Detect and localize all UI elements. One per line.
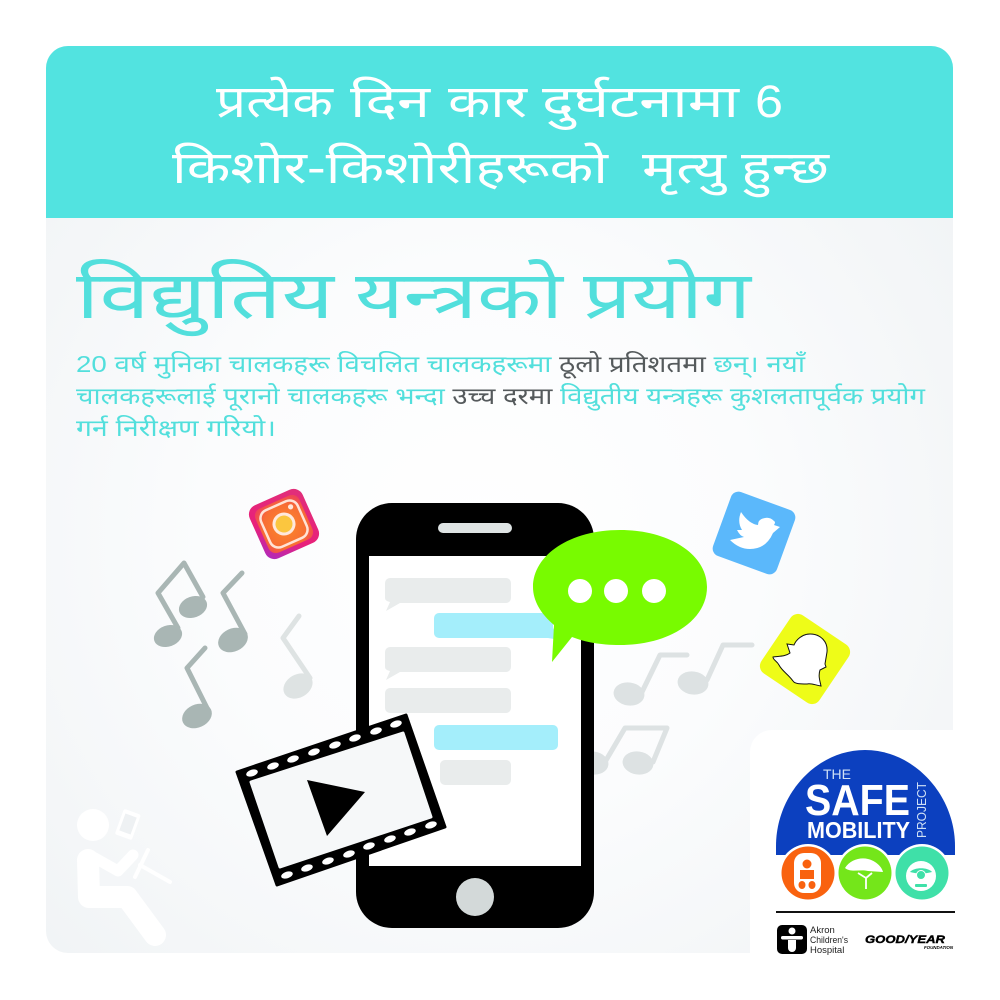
icon: snapchat (756, 610, 854, 708)
panel: logo corner (750, 730, 953, 953)
divider: logo rule (776, 911, 955, 913)
icon: film strip with play button (237, 715, 445, 885)
title: header text: दिन (350, 76, 431, 127)
logo: the safe mobility project: PROJECT (914, 782, 929, 838)
logo: akron children's hospital (777, 925, 848, 956)
logo: akron children's hospital: Hospital (810, 945, 844, 956)
icon: child seat (779, 844, 837, 902)
text block: description: 20 वर्ष मुनिका चालकहरू विचलित चालकहरूमा ठूलो प्रतिशतमा छन्। नयाँ (76, 351, 807, 379)
title: header text: दुर्घटनामा (542, 76, 741, 130)
heading: electronic device use (76, 258, 753, 336)
icon: steering wheel (893, 844, 951, 902)
logo: goodyear foundation (865, 934, 954, 950)
icons: dark music notes on left (151, 563, 252, 733)
logo: the safe mobility project (776, 750, 955, 902)
icon: bicycle helmet (836, 844, 894, 902)
text block: description: गर्न निरीक्षण गरियो। (76, 415, 276, 441)
icon: twitter (710, 489, 798, 577)
heading: electronic device use: प्रयोग (583, 258, 753, 332)
title: header text: 6 (755, 76, 783, 127)
icon: instagram (246, 486, 322, 562)
title: header text: किशोर-किशोरीहरूको (172, 142, 610, 193)
logo: the safe mobility project: THE (823, 766, 851, 782)
icon: green speech bubble (533, 530, 707, 662)
text block: description (76, 351, 926, 441)
title: header text: हुन्छ (741, 142, 831, 198)
logo: akron children's hospital: Children's (810, 935, 848, 946)
title: header text: कार (448, 76, 529, 127)
text block: description: चालकहरूलाई पूरानो चालकहरू भन्दा उच्च दरमा विद्युतीय यन्त्रहरू कुशलतापूर्वक प्रयोग (76, 383, 926, 411)
chat bubbles on screen (385, 578, 560, 785)
heading: electronic device use: विद्युतिय (76, 258, 336, 336)
heading: electronic device use: यन्त्रको (355, 258, 565, 332)
logo: the safe mobility project: MOBILITY (807, 817, 910, 843)
illustration: smartphone (356, 503, 594, 928)
icons: light music notes on right (576, 645, 752, 777)
icon: light music note (279, 616, 317, 704)
logo: goodyear foundation: FOUNDATION (924, 945, 954, 950)
panel: teal header band (46, 46, 953, 218)
logo: akron children's hospital: Akron (810, 925, 835, 936)
title: header text (172, 76, 831, 198)
logo: the safe mobility project: SAFE (805, 776, 910, 825)
icon: distracted driver (77, 809, 170, 935)
title: header text: मृत्यु (642, 142, 727, 196)
logo: goodyear foundation: GOOD/YEAR (865, 934, 945, 946)
title: header text: प्रत्येक (216, 76, 335, 127)
